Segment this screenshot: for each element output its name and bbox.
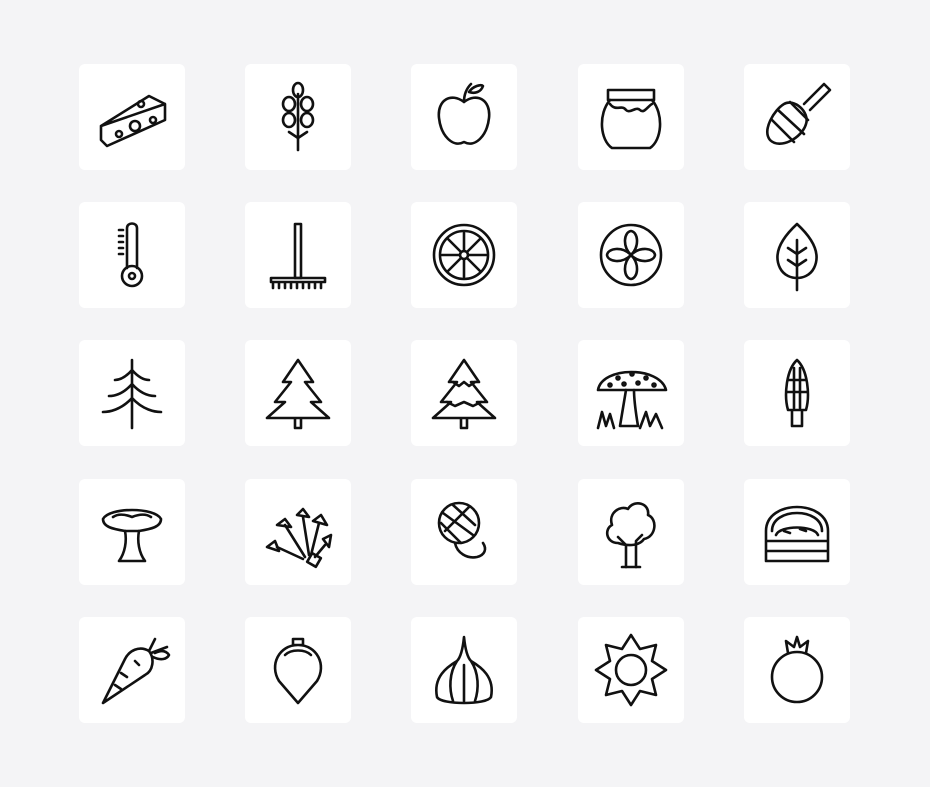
icon: fly agaric [578, 340, 684, 446]
icon: honey jar [578, 64, 684, 170]
icon: snowy pine [411, 340, 517, 446]
icon: mushroom bunch [245, 479, 351, 585]
icon: garlic [411, 617, 517, 723]
icon: cheese [79, 64, 185, 170]
icon: pine tree [245, 340, 351, 446]
icon: fir tree [79, 340, 185, 446]
icon: chanterelle [79, 479, 185, 585]
icon: morel [744, 340, 850, 446]
icon: tree [578, 479, 684, 585]
icon: lemon slice [578, 202, 684, 308]
icon: ball of yarn [411, 479, 517, 585]
icon: honey dipper [744, 64, 850, 170]
icon: pie oven [744, 479, 850, 585]
icon: turnip [245, 617, 351, 723]
icon: pomegranate [744, 617, 850, 723]
icon: orange slice [411, 202, 517, 308]
icon: apple [411, 64, 517, 170]
icon: carrot [79, 617, 185, 723]
icon: rake [245, 202, 351, 308]
icon: sun [578, 617, 684, 723]
icon: leaf [744, 202, 850, 308]
icon: berry branch [245, 64, 351, 170]
icon: thermometer [79, 202, 185, 308]
